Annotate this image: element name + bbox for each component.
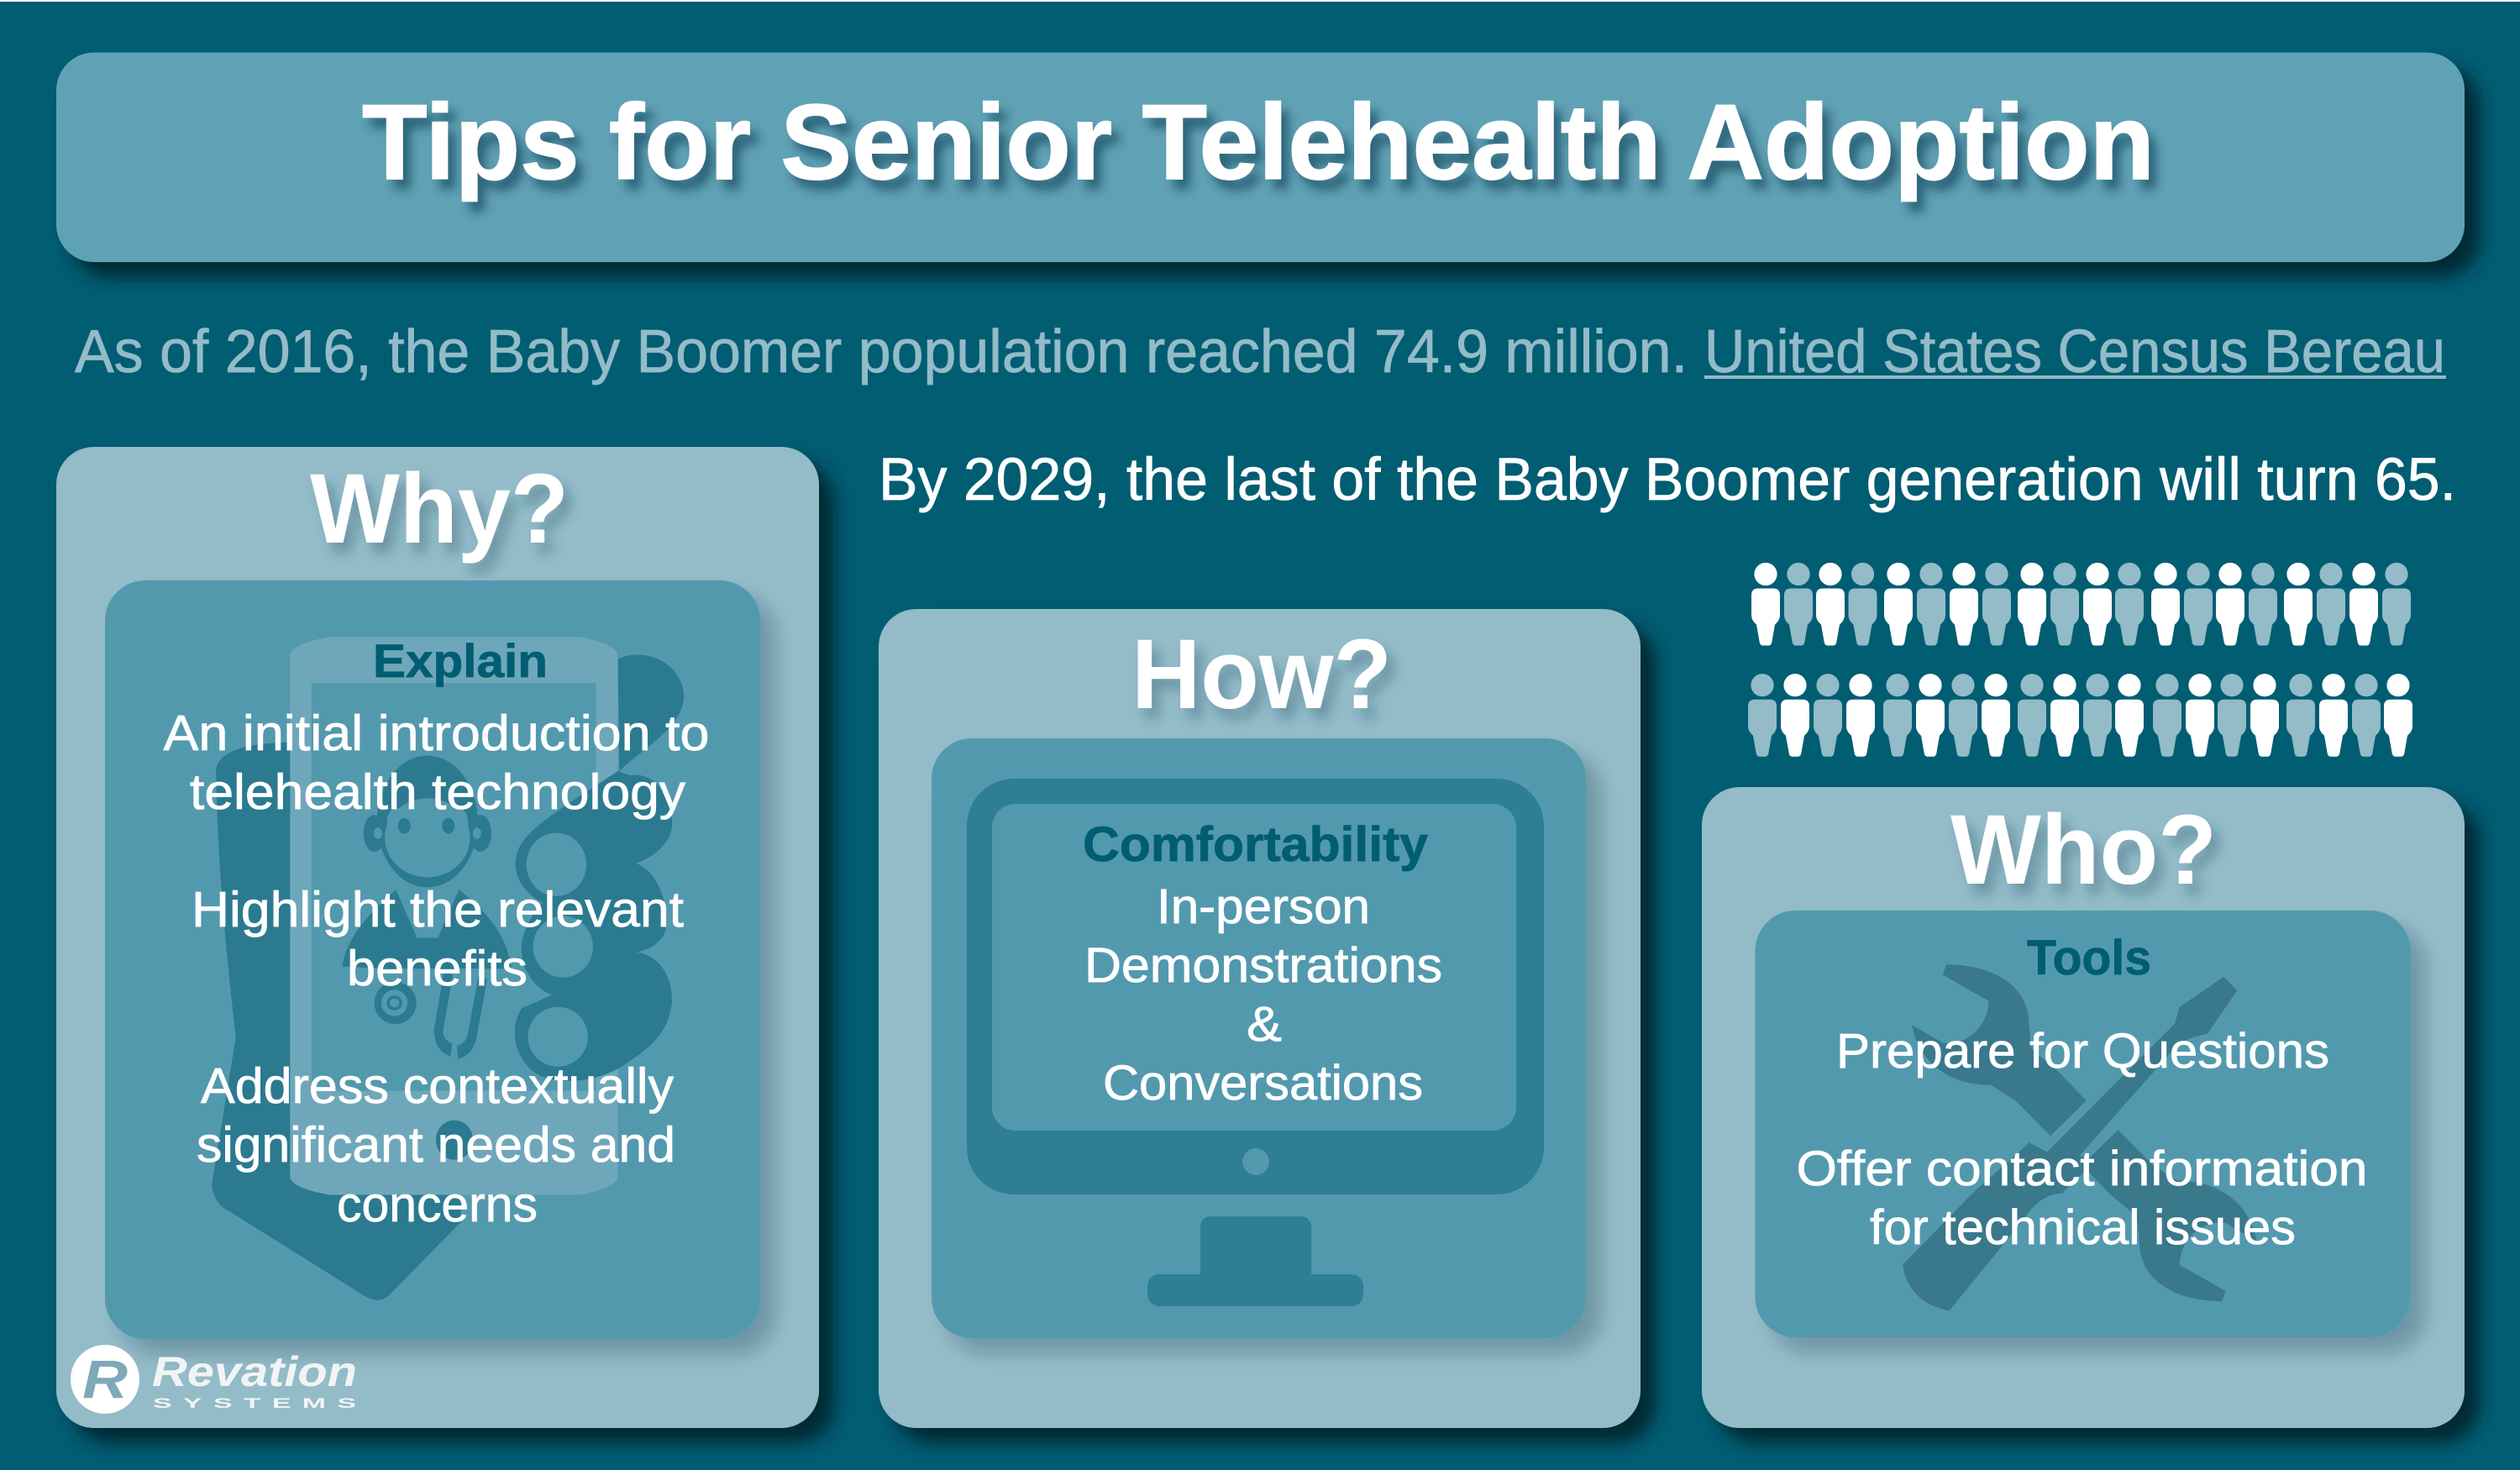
text: explain tips: An initial introduction to <box>163 706 709 761</box>
statistic: last boomers turn 65: By 2029, the last of the Baby Boomer generation will turn 65. <box>879 447 2456 513</box>
text: tools tips <box>1796 1024 2367 1255</box>
text: explain tips: benefits <box>347 941 528 996</box>
panel: why <box>56 447 819 1428</box>
people icons: population rows <box>1748 563 2412 757</box>
people row 2 <box>1748 674 2412 757</box>
subheading: tools: Tools <box>2027 931 2151 985</box>
heading: how: How? <box>1131 619 1392 730</box>
text: tools tips: Prepare for Questions <box>1836 1024 2329 1079</box>
logo: revation systems <box>71 1345 357 1414</box>
text: comfortability tips: Conversations <box>1103 1056 1423 1110</box>
subheading: comfortability: Comfortability <box>1083 817 1428 872</box>
inner card: comfortability <box>932 738 1586 1338</box>
text: explain tips <box>163 706 709 1232</box>
logo: revation systems: Revation <box>152 1348 357 1395</box>
panel: who <box>1702 787 2465 1428</box>
subheading: explain: Explain <box>373 634 548 687</box>
text: explain tips: concerns <box>337 1177 538 1232</box>
title banner <box>56 52 2465 262</box>
text: tools tips: Offer contact information <box>1796 1142 2367 1196</box>
text: explain tips: significant needs and <box>197 1117 675 1173</box>
icon: wrench and screwdriver <box>1903 964 2256 1310</box>
inner card: explain <box>105 580 760 1339</box>
text: explain tips: Address contextually <box>201 1058 675 1114</box>
heading: who: Who? <box>1950 795 2217 906</box>
text: tools tips: for technical issues <box>1870 1200 2296 1255</box>
people row 1 <box>1751 563 2411 645</box>
text: comfortability tips: & <box>1247 997 1282 1052</box>
inner card: tools <box>1756 911 2411 1337</box>
text: comfortability tips: In-person <box>1157 879 1370 934</box>
icon: computer monitor <box>967 779 1544 1306</box>
subtitle: population statistic: United States Census Bereau <box>1704 318 2445 386</box>
text: comfortability tips <box>1084 879 1442 1110</box>
icon: hand holding phone with doctor <box>212 637 684 1300</box>
subtitle: population statistic: As of 2016, the Baby Boomer population reached 74.9 million. <box>75 318 1688 386</box>
text: comfortability tips: Demonstrations <box>1084 938 1442 993</box>
text: explain tips: Highlight the relevant <box>192 882 684 937</box>
logo: revation systems: R <box>82 1349 128 1410</box>
heading: why: Why? <box>310 454 569 564</box>
title: Tips for Senior Telehealth Adoption <box>362 82 2155 202</box>
logo: revation systems: SYSTEMS <box>153 1395 356 1411</box>
panel: how <box>879 609 1641 1428</box>
text: explain tips: telehealth technology <box>190 764 686 820</box>
